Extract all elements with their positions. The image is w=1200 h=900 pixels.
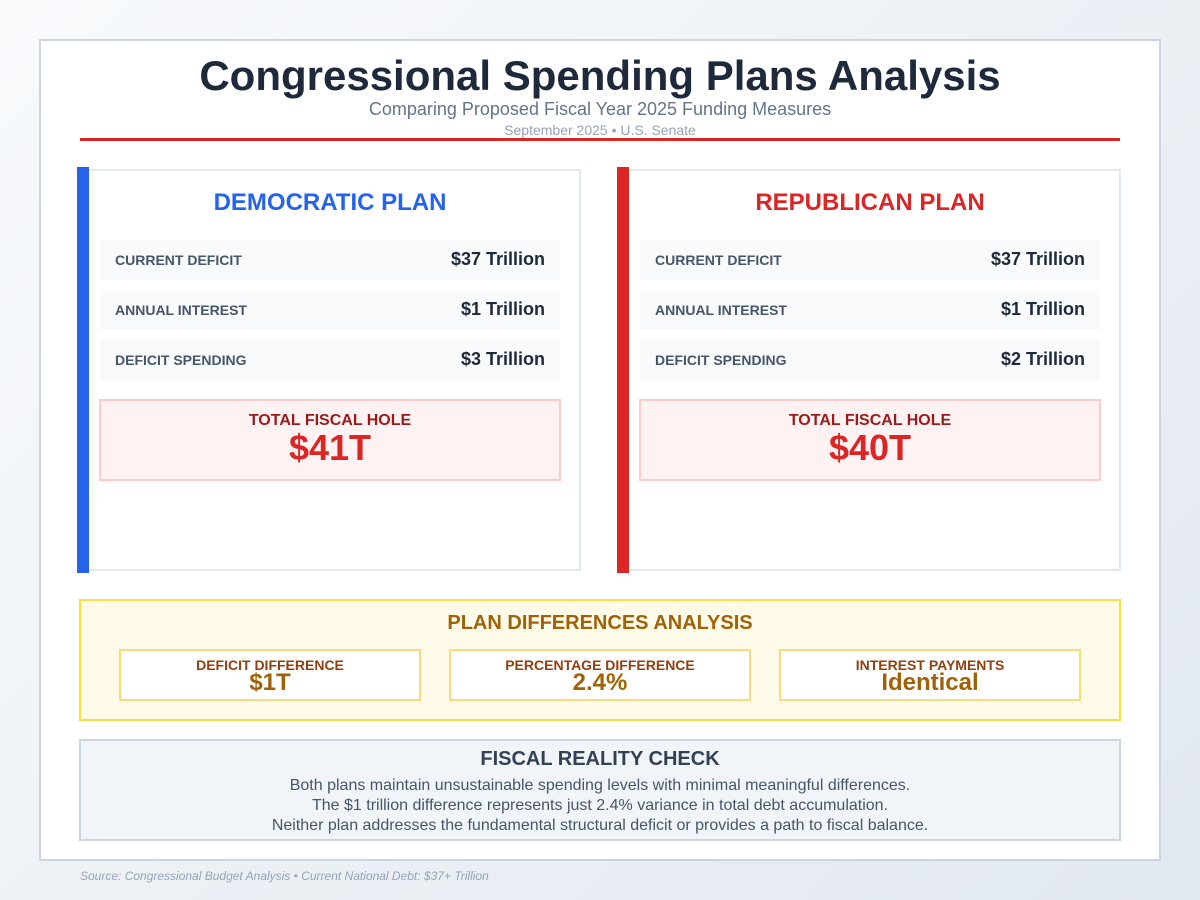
metric: percentage difference: 2.4% — [573, 669, 627, 696]
body text — [272, 777, 928, 834]
metric: interest payments: Identical — [881, 669, 979, 696]
metric: interest payments — [779, 649, 1081, 701]
row: current deficit: $37 Trillion — [991, 249, 1085, 269]
source note: Source: Congressional Budget Analysis • Current National Debt: $37+ Trillion — [80, 869, 489, 883]
metric: percentage difference — [449, 649, 751, 701]
metric: interest payments: INTEREST PAYMENTS — [856, 657, 1004, 673]
row: current deficit — [100, 240, 560, 280]
row: annual interest — [640, 290, 1100, 330]
row: deficit spending — [640, 340, 1100, 380]
row: current deficit: $37 Trillion — [451, 249, 545, 269]
heading: plan differences: PLAN DIFFERENCES ANALYSIS — [447, 612, 753, 634]
callout: total fiscal hole: TOTAL FISCAL HOLE — [789, 412, 951, 429]
callout: total fiscal hole — [639, 399, 1101, 481]
row: annual interest: $1 Trillion — [1001, 299, 1085, 319]
row: deficit spending: $3 Trillion — [461, 349, 545, 369]
callout: total fiscal hole: $40T — [829, 427, 911, 468]
metric: deficit difference: DEFICIT DIFFERENCE — [196, 657, 344, 673]
title: Congressional Spending Plans Analysis — [199, 52, 1001, 99]
header — [80, 52, 1120, 141]
metric: deficit difference: $1T — [249, 669, 291, 696]
heading: republican plan: REPUBLICAN PLAN — [755, 189, 985, 216]
panel: democratic plan — [79, 169, 581, 571]
accent bar: democratic — [77, 167, 89, 573]
subtitle: Comparing Proposed Fiscal Year 2025 Funding Measures — [369, 99, 831, 119]
metric: percentage difference: PERCENTAGE DIFFERENCE — [505, 657, 695, 673]
date line: September 2025 • U.S. Senate — [504, 122, 696, 138]
panel: republican plan — [619, 169, 1121, 571]
row: annual interest: ANNUAL INTEREST — [115, 302, 247, 318]
heading: fiscal reality check: FISCAL REALITY CHECK — [480, 748, 720, 770]
row: annual interest: ANNUAL INTEREST — [655, 302, 787, 318]
row: deficit spending: DEFICIT SPENDING — [655, 352, 786, 368]
panel: fiscal reality check — [79, 739, 1121, 841]
accent bar: republican — [617, 167, 629, 573]
row: annual interest: $1 Trillion — [461, 299, 545, 319]
row: deficit spending: DEFICIT SPENDING — [115, 352, 246, 368]
body text: Both plans maintain unsustainable spending levels with minimal meaningful differences. — [290, 777, 910, 794]
body text: The $1 trillion difference represents just 2.4% variance in total debt accumulation. — [312, 797, 888, 814]
row: current deficit: CURRENT DEFICIT — [115, 252, 242, 268]
panel: plan differences analysis — [79, 599, 1121, 721]
callout: total fiscal hole — [99, 399, 561, 481]
row: deficit spending — [100, 340, 560, 380]
callout: total fiscal hole: $41T — [289, 427, 371, 468]
row: current deficit: CURRENT DEFICIT — [655, 252, 782, 268]
metric: deficit difference — [119, 649, 421, 701]
row: annual interest — [100, 290, 560, 330]
callout: total fiscal hole: TOTAL FISCAL HOLE — [249, 412, 411, 429]
body text: Neither plan addresses the fundamental structural deficit or provides a path to fiscal balance. — [272, 817, 928, 834]
row: current deficit — [640, 240, 1100, 280]
heading: democratic plan: DEMOCRATIC PLAN — [214, 189, 446, 216]
row: deficit spending: $2 Trillion — [1001, 349, 1085, 369]
header rule — [80, 138, 1120, 141]
